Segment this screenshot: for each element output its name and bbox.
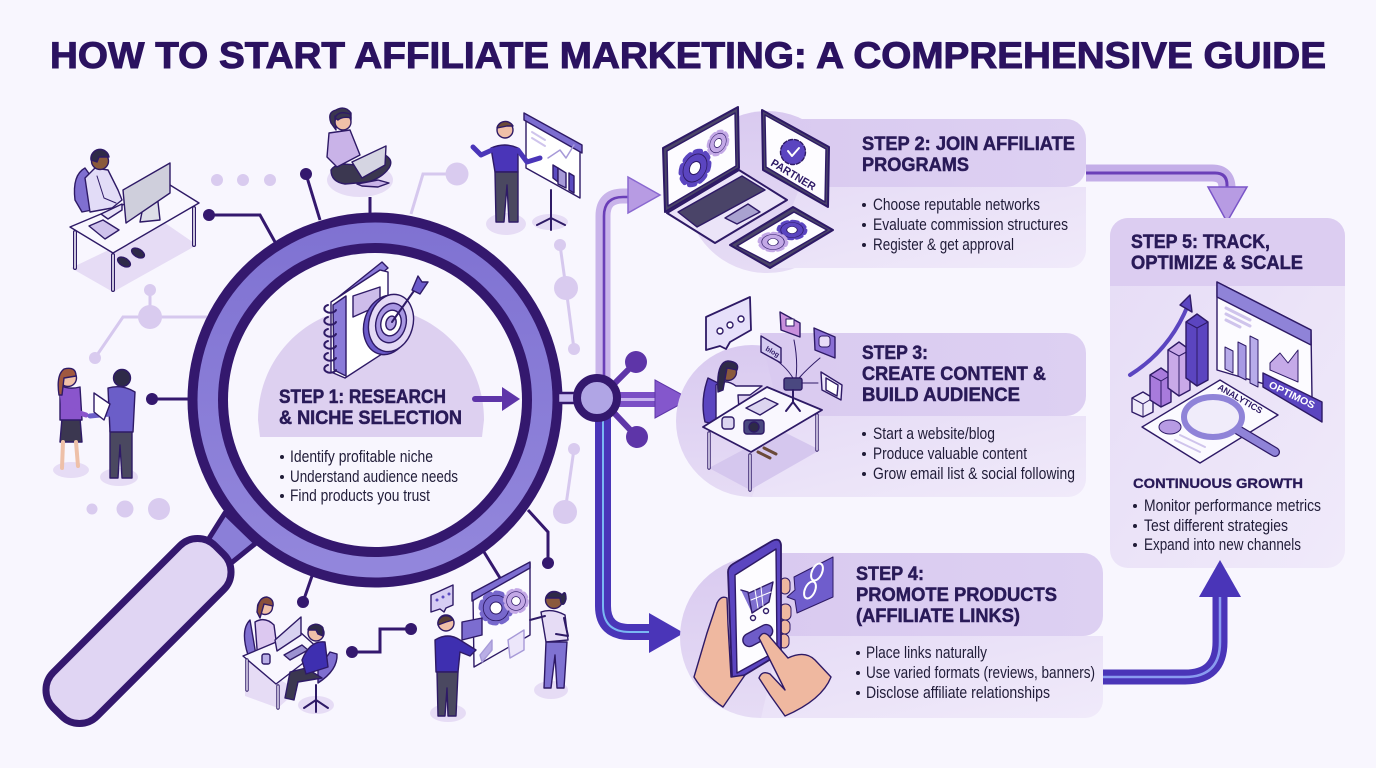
step 5 bullets: Test different strategies: [1144, 517, 1288, 535]
illustration: woman with laptop: [327, 108, 393, 197]
hub circle: [577, 378, 617, 418]
icon: content creator at desk: [703, 297, 842, 490]
step 3 heading: [862, 342, 1046, 406]
lens dome: [258, 307, 484, 437]
icon: laptop, tablet and gears: PARTNER: [768, 157, 818, 193]
step 5 bullets: [1133, 497, 1321, 554]
step 4 bullets: Place links naturally: [866, 644, 988, 662]
step 4 heading: [856, 563, 1057, 627]
step 2 bullets: Evaluate commission structures: [873, 216, 1068, 234]
step 1 heading: STEP 1: RESEARCH: [279, 386, 446, 408]
panel: step 4: [680, 540, 1103, 718]
step 3 bullets: Start a website/blog: [873, 425, 995, 443]
step 2 bullets: Choose reputable networks: [873, 196, 1040, 214]
arrow: step 4 to step 5: [1103, 560, 1241, 677]
arrow inside lens: [472, 387, 520, 411]
step 2 heading: STEP 2: JOIN AFFILIATE: [862, 133, 1075, 155]
circuit connectors and dots around magnifier: [86, 162, 580, 658]
illustration: handshake: [53, 368, 138, 486]
step 1 bullets: Identify profitable niche: [290, 448, 433, 466]
step 2 bullets: [862, 196, 1068, 254]
arrow: to step 4: [603, 412, 684, 653]
panel: step 3: [676, 297, 1086, 497]
step 2 heading: PROGRAMS: [862, 154, 969, 176]
panel: step 2: [663, 107, 1086, 273]
icon: analytics dashboard: ANALYTICS: [1216, 382, 1264, 416]
magnifying glass: [36, 212, 562, 734]
arrow: to step 3: [618, 380, 690, 418]
illustration: two people at gear board: [430, 562, 568, 722]
step 1 bullets: Understand audience needs: [290, 468, 458, 486]
icon: analytics dashboard: [1130, 282, 1322, 463]
handle: [36, 513, 256, 734]
step 5 heading: [1131, 231, 1303, 274]
step 3 bullets: Grow email list & social following: [873, 465, 1075, 483]
lens ring: [188, 212, 562, 588]
icon: laptop, tablet and gears: [663, 107, 833, 268]
step 5 heading: STEP 5: TRACK,: [1131, 231, 1270, 253]
illustration: presenter and chart board: [473, 113, 582, 235]
illustration: team at desk: [243, 597, 337, 714]
step 3 bullets: [862, 425, 1075, 483]
step 4 heading: STEP 4:: [856, 563, 924, 585]
step 3 bullets: Produce valuable content: [873, 445, 1027, 463]
step 1 heading: [279, 386, 462, 429]
step 4 heading: (AFFILIATE LINKS): [856, 605, 1020, 627]
continuous growth subheading: CONTINUOUS GROWTH: [1133, 475, 1303, 491]
panel: step 5: [1110, 218, 1345, 568]
step 1 heading: & NICHE SELECTION: [279, 407, 462, 429]
step 4 bullets: Use varied formats (reviews, banners): [866, 664, 1095, 682]
arrow: to step 2: [603, 177, 660, 385]
step 5 bullets: Expand into new channels: [1144, 536, 1301, 554]
step 5 bullets: Monitor performance metrics: [1144, 497, 1321, 515]
step 1 bullets: [280, 448, 458, 505]
icon: analytics dashboard: OPTIMOS: [1267, 380, 1317, 412]
icon: content creator at desk: blog: [764, 346, 780, 359]
step 5 heading: OPTIMIZE & SCALE: [1131, 252, 1303, 274]
step 2 heading: [862, 133, 1075, 176]
title: HOW TO START AFFILIATE MARKETING: A COMPREHENSIVE GUIDE: [50, 35, 1326, 76]
step 3 heading: CREATE CONTENT &: [862, 363, 1046, 385]
step 3 heading: BUILD AUDIENCE: [862, 384, 1020, 406]
arrow: step 2 to step 5: [1086, 173, 1247, 222]
step 4 heading: PROMOTE PRODUCTS: [856, 584, 1057, 606]
step 1 bullets: Find products you trust: [290, 487, 430, 505]
step 4 bullets: Disclose affiliate relationships: [866, 684, 1050, 702]
connector: hub and branch nodes: [558, 351, 648, 448]
icon: notebook and target: [324, 262, 428, 378]
illustration: person at desk: [70, 149, 199, 292]
step 3 heading: STEP 3:: [862, 342, 928, 364]
step 4 bullets: [856, 644, 1095, 702]
step 2 bullets: Register & get approval: [873, 236, 1014, 254]
icon: phone in hand with cart and link: [694, 540, 833, 716]
